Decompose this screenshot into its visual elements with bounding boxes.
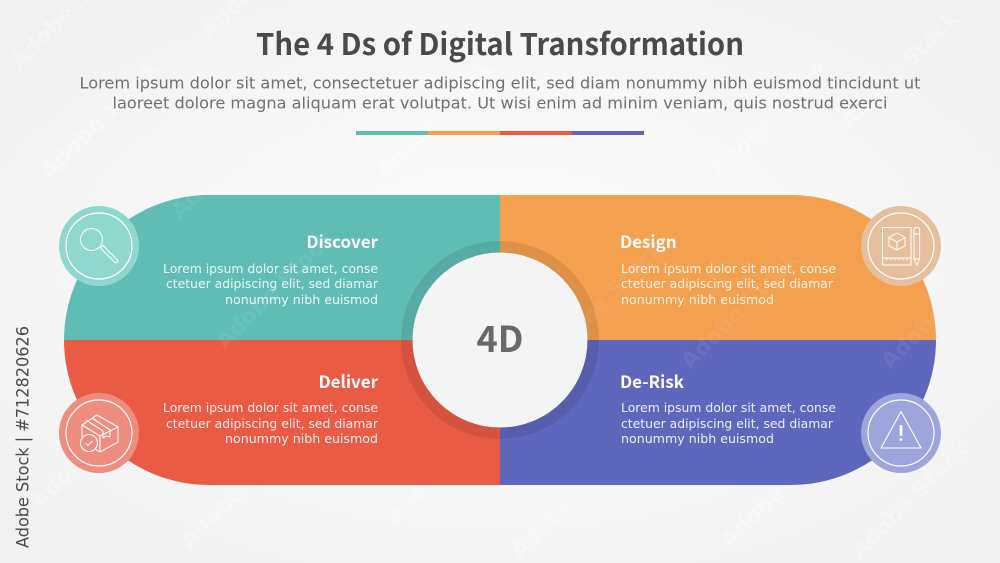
watermark over diagram — [167, 96, 1000, 374]
watermark over diagram: Adobe Stock — [167, 96, 295, 224]
text block: design — [620, 228, 836, 307]
text block: de-risk: ctetuer adipiscing elit, sed diamar — [621, 417, 833, 431]
text block: de-risk: nonummy nibh euismod — [621, 432, 774, 446]
pill diagram with four quadrants — [64, 195, 936, 485]
subtitle text — [80, 74, 920, 112]
title divider: four colour bar — [356, 131, 644, 135]
text block: discover: Lorem ipsum dolor sit amet, conse — [163, 262, 378, 276]
text block: deliver: ctetuer adipiscing elit, sed diamar — [166, 417, 378, 431]
watermark text: Adobe Stock — [37, 56, 165, 184]
watermark text: Adobe Stock — [707, 56, 835, 184]
text block: deliver: nonummy nibh euismod — [225, 432, 378, 446]
panel: deliver quadrant — [64, 340, 500, 485]
text block: design: nonummy nibh euismod — [621, 293, 774, 307]
icon: warning badge — [861, 393, 941, 473]
text block: design: Lorem ipsum dolor sit amet, conse — [621, 262, 836, 276]
text block: deliver: Lorem ipsum dolor sit amet, conse — [163, 401, 378, 415]
watermark text: Adobe Stock — [837, 6, 965, 134]
icon: design book and pencil badge — [861, 206, 941, 286]
watermark text: Adobe Stock — [372, 56, 500, 184]
watermark text: Adobe Stock — [382, 401, 510, 529]
panel: discover quadrant — [64, 195, 500, 340]
text block: deliver — [163, 368, 379, 446]
icon: delivered box badge — [59, 393, 139, 473]
text block: design: Design — [620, 228, 677, 253]
watermark over diagram: Adobe Stock — [212, 226, 340, 354]
panel: de-risk quadrant — [500, 340, 936, 485]
watermark text: Adobe Stock — [27, 386, 155, 514]
center circle with 4D label — [412, 252, 588, 428]
center ring — [407, 247, 593, 433]
text block: de-risk — [620, 368, 836, 446]
watermark text: Adobe Stock — [717, 426, 845, 554]
subtitle text: laoreet dolore magna aliquam erat volutpat. Ut wisi enim ad minim veniam, quis nostrud exerci — [112, 94, 888, 112]
watermark text: Adobe Stock — [177, 426, 305, 554]
text block: design: ctetuer adipiscing elit, sed diamar — [621, 277, 833, 291]
text block: discover: Discover — [306, 228, 379, 253]
text block: discover: nonummy nibh euismod — [225, 293, 378, 307]
watermark over diagram: Adobe Stock — [677, 246, 805, 374]
stock id vertical label: Adobe Stock | #712820626 — [14, 326, 32, 548]
title: The 4 Ds of Digital Transformation — [256, 20, 744, 64]
icon: magnifier badge — [59, 206, 139, 286]
text block: de-risk: Lorem ipsum dolor sit amet, conse — [621, 401, 836, 415]
panel: design quadrant — [500, 195, 936, 340]
text block: discover — [163, 228, 379, 307]
watermark text: Adobe Stock — [847, 436, 975, 563]
watermark over diagram: Adobe Stock — [542, 236, 670, 364]
text block: discover: ctetuer adipiscing elit, sed diamar — [166, 277, 378, 291]
center circle with 4D label: 4D — [477, 311, 523, 363]
watermark text: Adobe Stock — [507, 436, 635, 563]
text block: de-risk: De-Risk — [620, 368, 685, 393]
subtitle text: Lorem ipsum dolor sit amet, consectetuer adipiscing elit, sed diam nonummy nibh euismod tincidunt ut — [80, 74, 920, 92]
text block: deliver: Deliver — [319, 368, 379, 393]
